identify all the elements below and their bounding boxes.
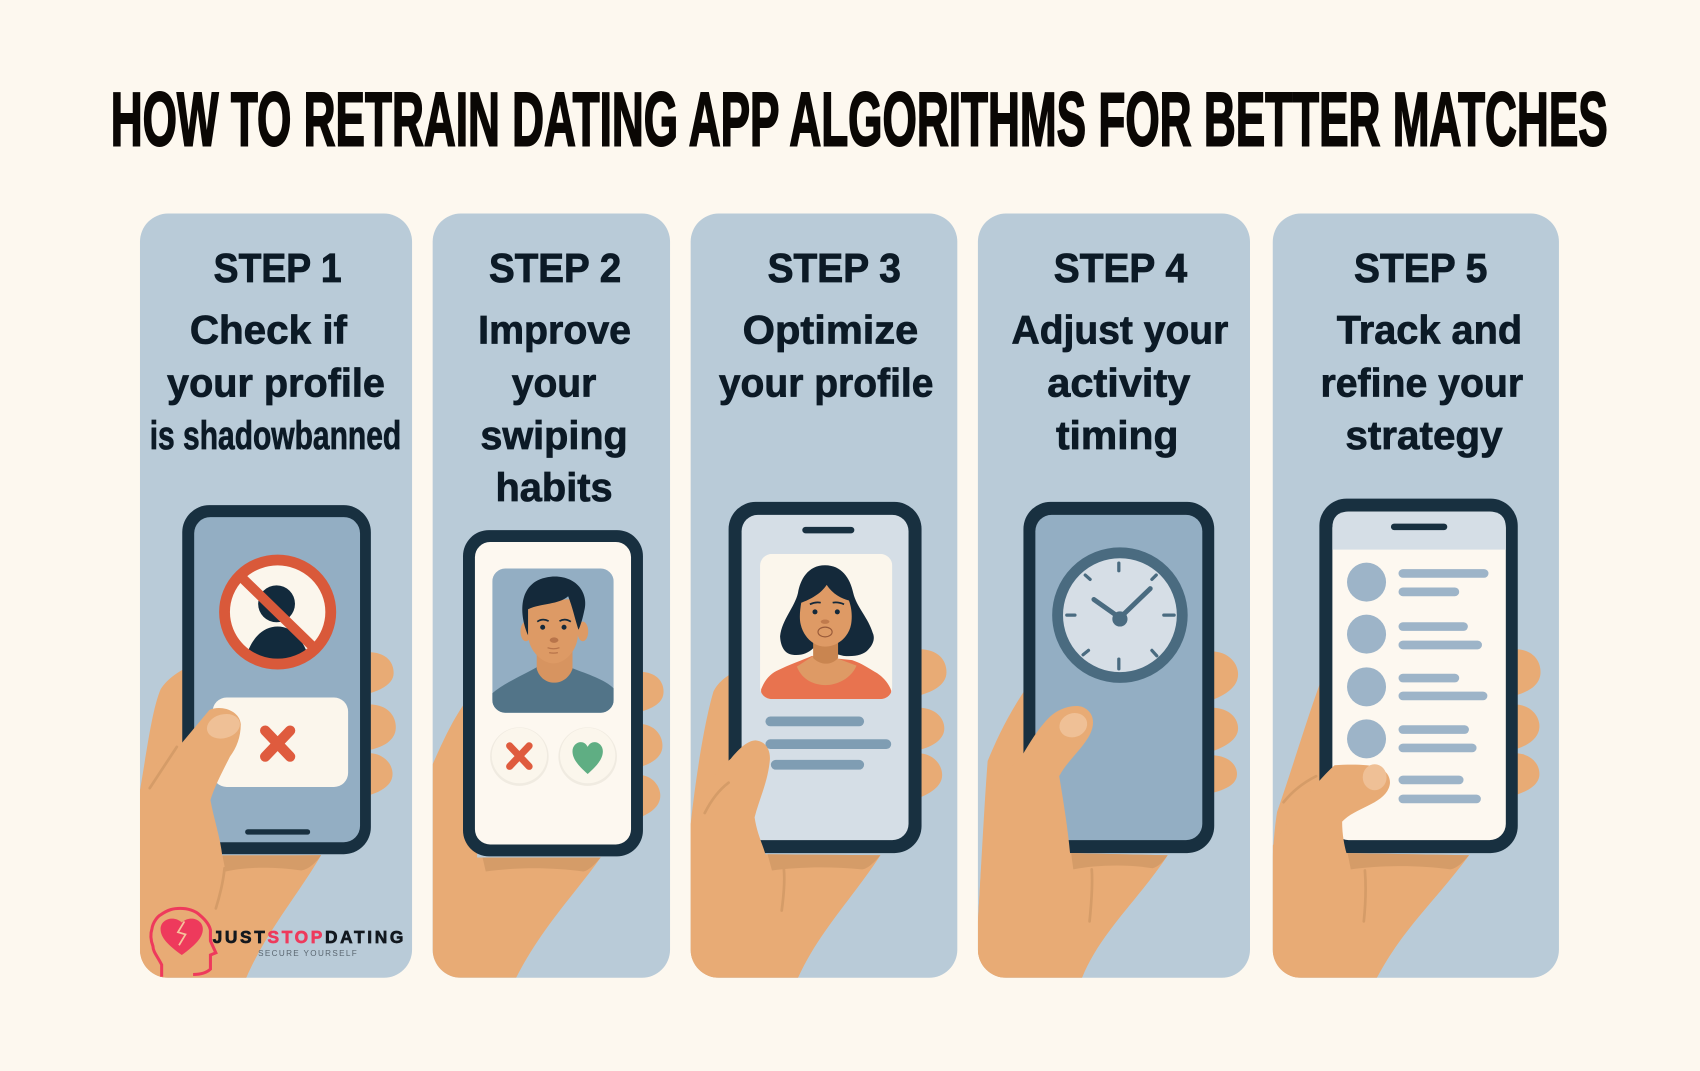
step 1 description: your profile: [167, 362, 385, 406]
step 1 heading: STEP 1: [214, 245, 342, 291]
thumb and palm, step 1: [140, 708, 321, 978]
panel: step 1: [140, 214, 412, 978]
step 2 description: Improve: [478, 309, 631, 353]
step 3 description: [719, 309, 933, 406]
reject card with x: [213, 698, 348, 787]
step 4 description: [1012, 309, 1228, 458]
step 5 description: refine your: [1320, 362, 1523, 406]
step 5 description: strategy: [1345, 414, 1503, 458]
panel: step 2: [433, 214, 670, 978]
hand behind phone, step 4: [978, 651, 1238, 978]
icon: banned profile: [225, 560, 331, 678]
step 2 description: your: [512, 362, 596, 406]
step 5 heading: STEP 5: [1354, 245, 1487, 291]
step 4 description: Adjust your: [1012, 309, 1228, 353]
step 4 heading: STEP 4: [1054, 245, 1187, 291]
phone: profile screen: [729, 502, 922, 853]
icon: head with broken heart: [151, 908, 216, 977]
thumb and palm, step 3: [691, 740, 880, 978]
hand, step 2: [433, 672, 664, 978]
phone: swipe screen: [463, 530, 643, 856]
step 2 description: habits: [496, 466, 613, 510]
hand behind phone, step 5: [1273, 649, 1541, 978]
phone: shadowban screen: [182, 505, 371, 854]
step 5 description: [1320, 309, 1523, 458]
logo wordmark: JUSTSTOPDATING: [213, 927, 403, 947]
profile photo: man: [492, 568, 614, 715]
thumb and palm, step 5: [1273, 764, 1469, 978]
panel: step 4: [978, 214, 1250, 978]
logo tagline: SECURE YOURSELF: [258, 949, 357, 958]
step 1 description: is shadowbanned: [150, 414, 401, 458]
step 3 description: your profile: [719, 362, 933, 406]
step 4 description: timing: [1056, 414, 1178, 458]
logo: just stop dating: [151, 908, 403, 977]
hand behind phone, step 3: [691, 649, 946, 978]
thumb and palm, step 4: [978, 706, 1168, 978]
profile text lines: [765, 717, 891, 770]
step 2 heading: STEP 2: [489, 245, 621, 291]
icon: clock: [1058, 553, 1182, 678]
list rows: [1347, 563, 1488, 803]
profile photo: woman: [760, 554, 892, 699]
step 1 description: Check if: [190, 309, 348, 353]
step 3 description: Optimize: [743, 309, 918, 353]
phone: clock screen: [1023, 502, 1214, 853]
phone: tracking list screen: [1319, 499, 1518, 853]
step 1 description: [150, 309, 401, 458]
button: reject: [490, 727, 549, 786]
step 4 description: activity: [1047, 362, 1191, 406]
step 2 description: swiping: [480, 414, 628, 458]
panel: step 3: [691, 214, 957, 978]
step 5 description: Track and: [1337, 309, 1522, 353]
panel: step 5: [1273, 214, 1559, 978]
button: like: [558, 727, 617, 786]
hand behind phone, step 1: [140, 652, 396, 978]
step 3 heading: STEP 3: [768, 245, 901, 291]
step 2 description: [478, 309, 631, 510]
